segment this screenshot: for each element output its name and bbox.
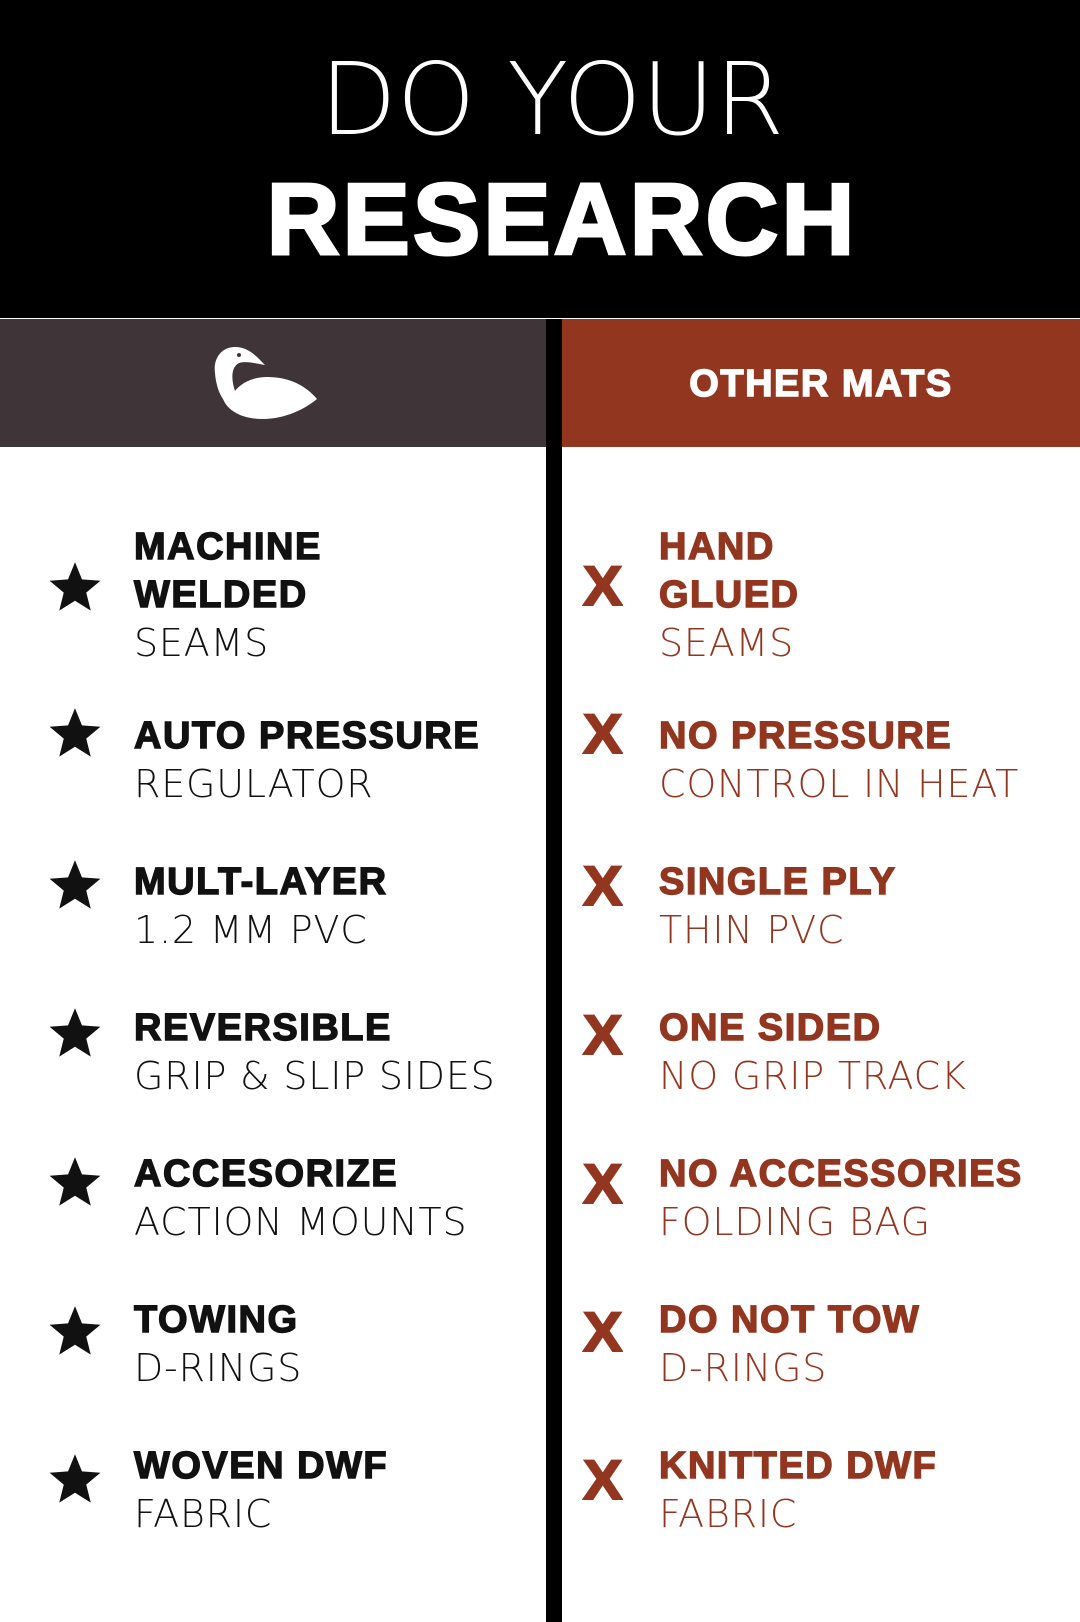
row 5 left: ACTION MOUNTS — [134, 1200, 467, 1244]
row 4 left: GRIP & SLIP SIDES — [134, 1054, 496, 1098]
row 4 right: NO GRIP TRACK — [659, 1054, 967, 1098]
row 2 right: CONTROL IN HEAT — [659, 762, 1019, 806]
row 2 left: REGULATOR — [134, 762, 374, 806]
divider — [546, 319, 562, 1622]
row 5 right: FOLDING BAG — [659, 1200, 931, 1244]
row 4 right — [582, 1003, 967, 1098]
row 1 right: GLUED — [659, 574, 800, 616]
row 5 left: ACCESORIZE — [134, 1153, 398, 1195]
row 3 right: X — [583, 854, 622, 917]
row 1 left: SEAMS — [134, 621, 269, 665]
row 1 right: SEAMS — [659, 621, 794, 665]
row 6 left: D-RINGS — [134, 1346, 302, 1390]
row 5 left — [50, 1153, 467, 1244]
row 1 right: HAND — [659, 526, 775, 568]
row 1 right: X — [583, 554, 622, 617]
row 2 left — [50, 708, 480, 806]
row 7 right: FABRIC — [659, 1492, 797, 1536]
row 3 right — [582, 854, 896, 952]
panel header: brand — [0, 319, 546, 447]
row 2 right: NO PRESSURE — [659, 715, 952, 757]
row 5 right: X — [583, 1152, 622, 1215]
row 6 right: D-RINGS — [659, 1346, 827, 1390]
row 3 left: MULT-LAYER — [134, 861, 388, 903]
row 7 left: FABRIC — [134, 1492, 272, 1536]
row 5 right: NO ACCESSORIES — [659, 1153, 1023, 1195]
row 3 right: SINGLE PLY — [659, 861, 896, 903]
row 4 left — [50, 1007, 496, 1098]
row 1 left: MACHINE — [134, 526, 322, 568]
row 5 right — [582, 1152, 1023, 1244]
icon: loon bird — [214, 347, 317, 419]
title line 1: DO YOUR — [320, 41, 784, 158]
row 7 left: WOVEN DWF — [134, 1445, 388, 1487]
panel header: other mats — [562, 319, 1080, 447]
row 1 left — [50, 526, 322, 665]
row 2 left: AUTO PRESSURE — [134, 715, 480, 757]
row 6 left — [50, 1299, 302, 1390]
row 3 left: 1.2 MM PVC — [134, 908, 368, 952]
row 6 left: TOWING — [134, 1299, 299, 1341]
row 7 right — [582, 1445, 937, 1536]
row 7 right: X — [583, 1448, 622, 1511]
row 3 left — [50, 860, 388, 952]
row 2 right — [582, 702, 1019, 806]
row 7 right: KNITTED DWF — [659, 1445, 937, 1487]
row 1 left: WELDED — [134, 574, 308, 616]
row 6 right — [582, 1299, 920, 1390]
row 3 right: THIN PVC — [659, 908, 844, 952]
header band — [0, 0, 1080, 318]
row 4 right: ONE SIDED — [659, 1007, 882, 1049]
row 1 right — [582, 526, 800, 665]
right column rows — [582, 526, 1023, 1536]
row 7 left — [50, 1445, 388, 1536]
row 2 right: X — [583, 702, 622, 765]
row 4 left: REVERSIBLE — [134, 1007, 392, 1049]
row 6 right: X — [583, 1300, 622, 1363]
left column rows — [50, 526, 496, 1536]
row 4 right: X — [583, 1003, 622, 1066]
title line 2: RESEARCH — [267, 164, 857, 276]
row 6 right: DO NOT TOW — [659, 1299, 920, 1341]
heading: other mats: OTHER MATS — [689, 363, 953, 405]
